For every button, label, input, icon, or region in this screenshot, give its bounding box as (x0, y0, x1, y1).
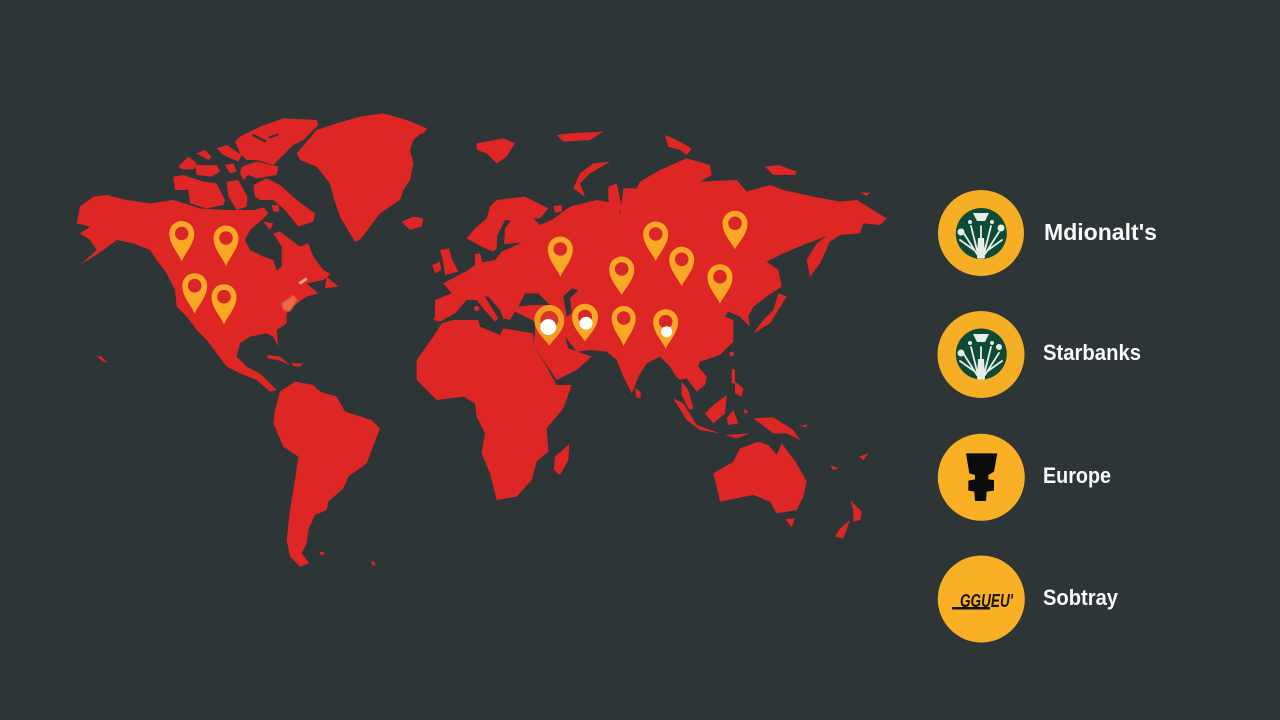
legend item: third brand (938, 434, 1111, 521)
region: africa and oceania (417, 320, 868, 538)
badge (938, 311, 1024, 398)
location pins: north america (169, 221, 238, 325)
label: Sobtray (1043, 585, 1119, 610)
icon: italic wordmark: GGUEU' (960, 591, 1014, 611)
badge (938, 556, 1025, 642)
icon: black glyph (966, 453, 997, 501)
pin with highlight (534, 305, 564, 346)
icon: green siren logo (956, 208, 1007, 259)
pin with highlight (572, 304, 598, 342)
label: Starbanks (1043, 340, 1141, 365)
pin (182, 273, 207, 314)
legend item: fourth brand (938, 556, 1119, 642)
world map (77, 113, 887, 567)
icon: italic wordmark (952, 591, 1014, 611)
pin (643, 222, 668, 261)
pin with highlight (653, 309, 678, 349)
location pins: eurasia (534, 211, 748, 349)
pin (212, 284, 236, 325)
badge (938, 434, 1025, 521)
region: south america (267, 355, 380, 567)
pin (669, 247, 694, 286)
pin (708, 264, 732, 304)
region: eurasia (420, 127, 887, 393)
label: Mdionalt's (1044, 219, 1157, 245)
pin (722, 211, 748, 249)
region: north america and greenland (77, 113, 427, 392)
pin (214, 226, 238, 266)
region: canadian arctic islands (173, 118, 318, 227)
pin (548, 236, 573, 277)
legend item: first brand (938, 190, 1157, 276)
icon: green siren logo (956, 328, 1007, 380)
label: Europe (1043, 463, 1111, 488)
pin (612, 306, 636, 346)
pin (609, 256, 634, 295)
legend item: second brand (938, 311, 1141, 398)
pin (169, 221, 194, 262)
badge (938, 190, 1024, 276)
